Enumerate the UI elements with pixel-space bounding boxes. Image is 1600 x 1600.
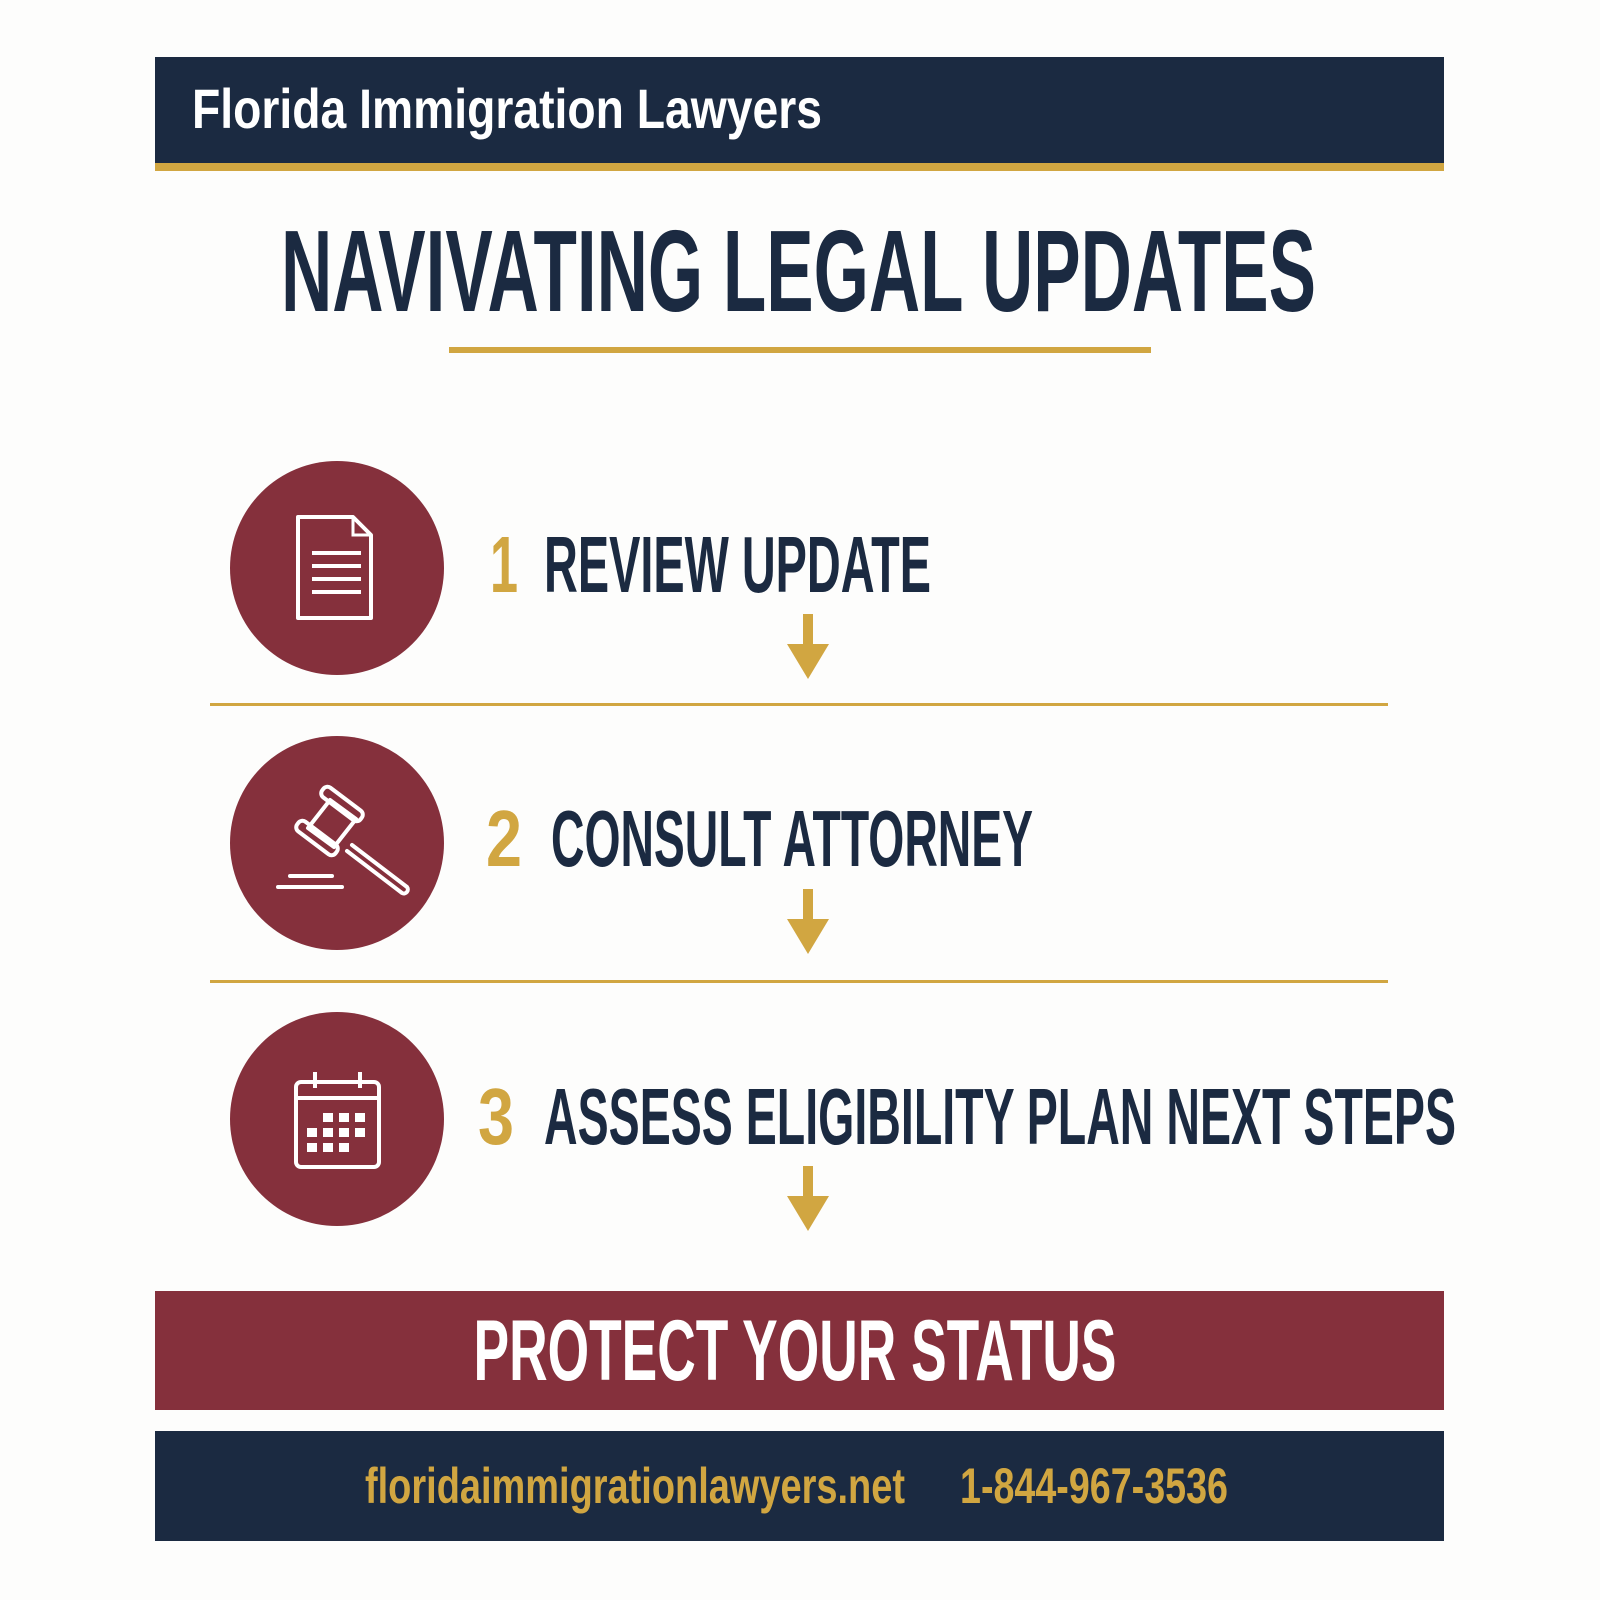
arrow: [787, 889, 829, 954]
arrow: [787, 614, 829, 679]
step 3: [230, 1012, 1456, 1231]
step 1: [230, 461, 931, 679]
step 2: CONSULT ATTORNEY: [551, 794, 1033, 883]
header bar: Florida Immigration Lawyers: [192, 77, 822, 140]
header bar: [155, 57, 1444, 171]
step 3: 3: [478, 1072, 514, 1161]
banner: protect your status: [155, 1291, 1444, 1410]
banner: protect your status: PROTECT YOUR STATUS: [474, 1303, 1116, 1399]
icon: calendar: [230, 1012, 444, 1226]
icon: document: [230, 461, 444, 675]
arrow: [787, 1166, 829, 1231]
step 2: 2: [486, 794, 522, 883]
step 1: 1: [490, 520, 518, 609]
icon: gavel: [230, 736, 444, 950]
footer: 1-844-967-3536: [960, 1458, 1228, 1514]
step 1: REVIEW UPDATE: [544, 520, 931, 609]
step 2: [230, 736, 1033, 954]
footer: floridaimmigrationlawyers.net: [365, 1458, 905, 1514]
title underline: [449, 347, 1151, 353]
footer: [155, 1431, 1444, 1541]
